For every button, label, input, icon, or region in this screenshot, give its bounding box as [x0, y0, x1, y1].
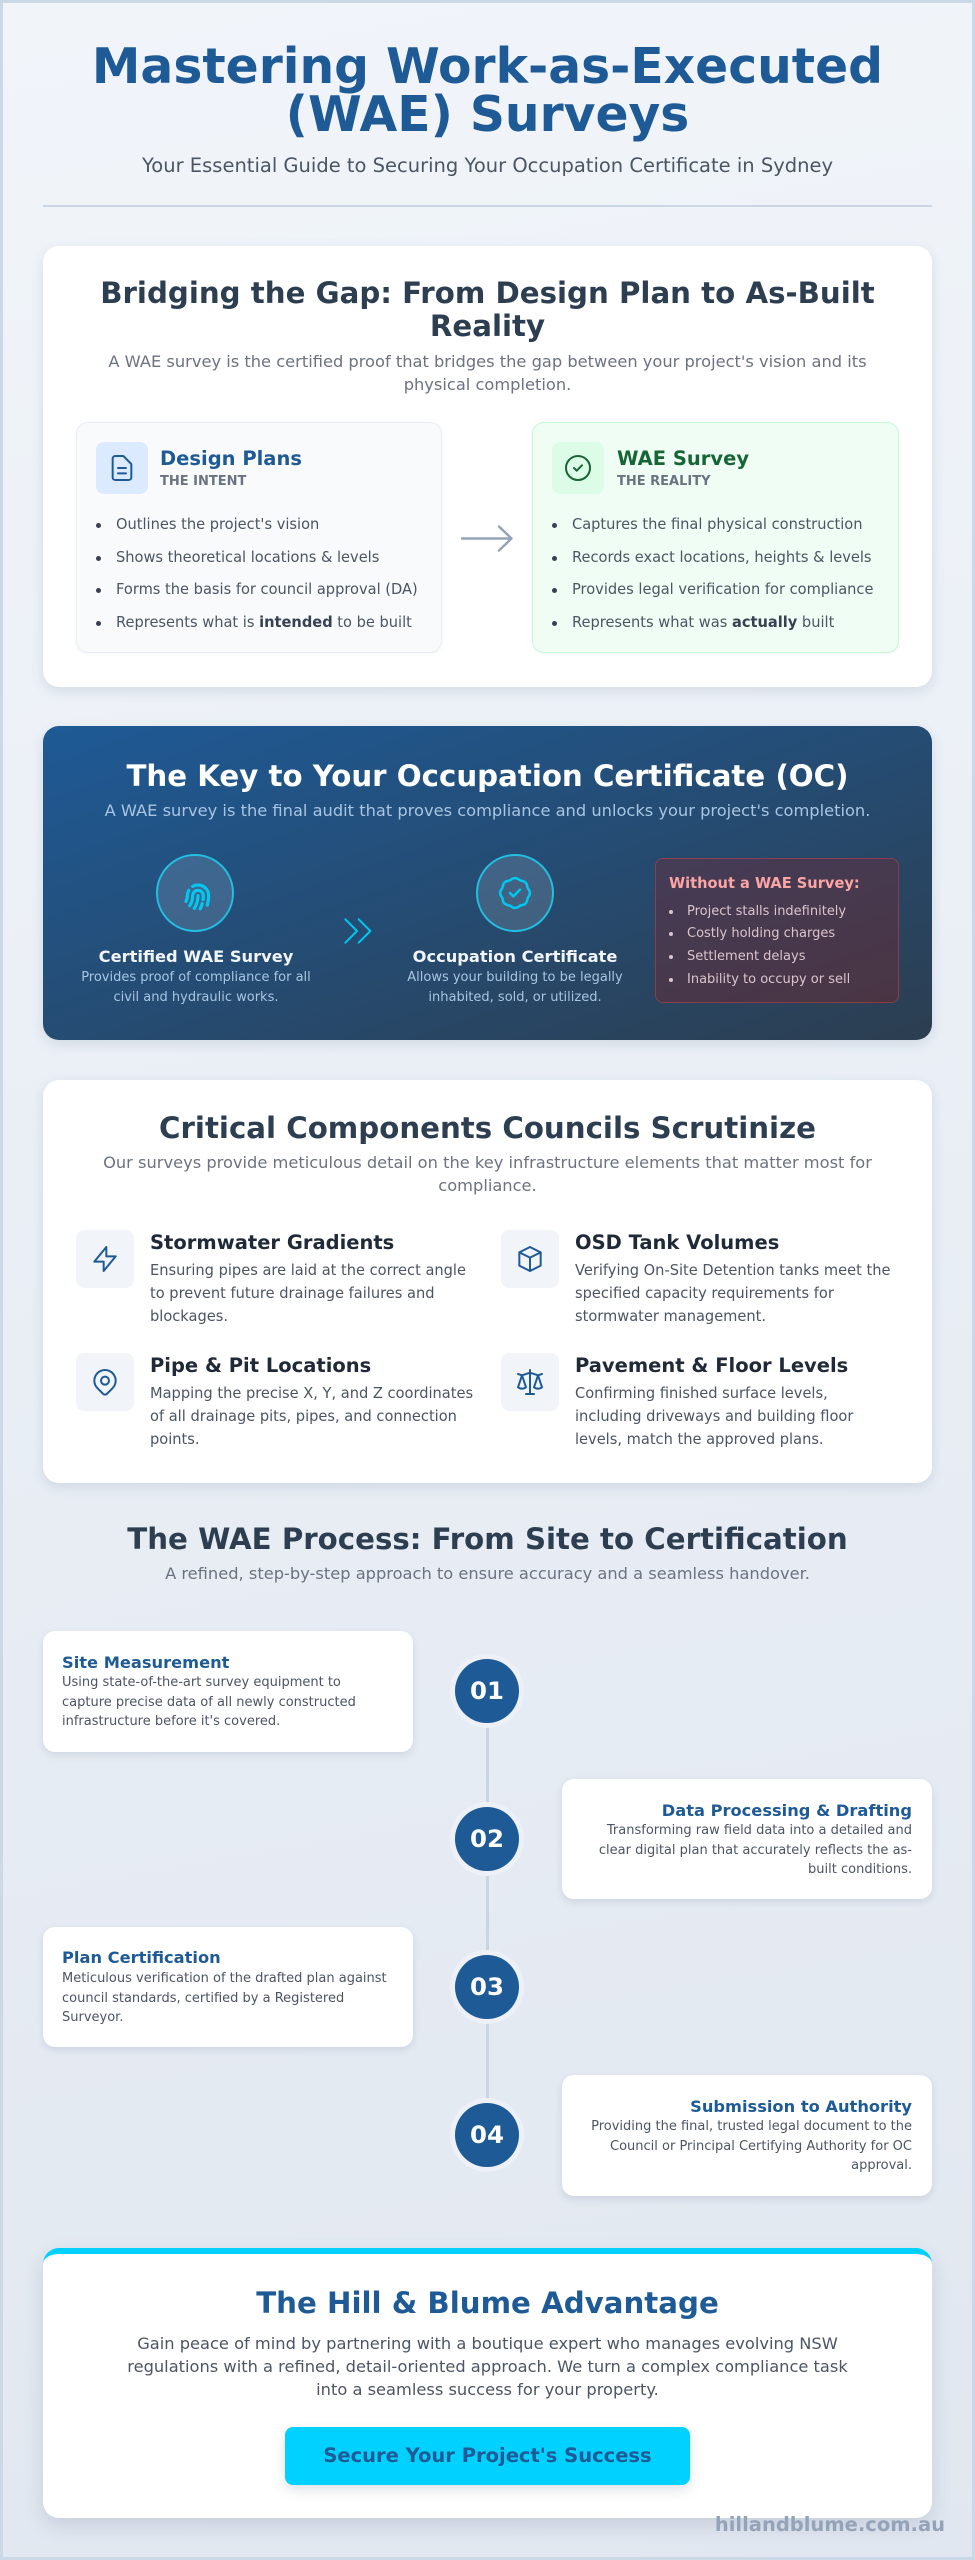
timeline line [486, 1691, 488, 2135]
icon: fingerprint circle [156, 854, 234, 932]
heading: Critical Components Councils Scrutinize [159, 1111, 816, 1145]
intro text [108, 352, 867, 394]
step title: Data Processing & Drafting [662, 1801, 912, 1820]
body text: Gain peace of mind by partnering with a boutique expert who manages evolving NSW [137, 2334, 838, 2353]
component text: blockages. [150, 1308, 228, 1325]
intro text: A refined, step-by-step approach to ensure accuracy and a seamless handover. [165, 1564, 810, 1583]
icon: document [96, 442, 148, 494]
icon: badge circle [476, 854, 554, 932]
icon: bolt [76, 1230, 134, 1288]
component text [150, 1262, 466, 1325]
panel: design plans [76, 422, 442, 653]
step title: Plan Certification [62, 1948, 221, 1967]
step 03 number [455, 1955, 519, 2019]
component title: Pipe & Pit Locations [150, 1354, 371, 1377]
panel: hill and blume advantage [43, 2248, 932, 2518]
step text: occupation certificate: inhabited, sold, or utilized. [428, 990, 602, 1004]
callout list [669, 904, 850, 987]
step text: built conditions. [808, 1862, 912, 1877]
component text: Verifying On-Site Detention tanks meet the [575, 1262, 890, 1279]
step text: Using state-of-the-art survey equipment to [62, 1675, 341, 1690]
component text: specified capacity requirements for [575, 1285, 834, 1302]
body text [127, 2334, 848, 2399]
step text: clear digital plan that accurately reflects the as- [599, 1842, 912, 1858]
step text: occupation certificate [407, 970, 623, 1004]
component title: Stormwater Gradients [150, 1231, 394, 1254]
title: (WAE) Surveys [286, 87, 689, 143]
step 03 card [43, 1927, 413, 2047]
WAE survey list: Represents what was actually built [572, 614, 834, 630]
heading: The Key to Your Occupation Certificate (OC) [126, 759, 849, 793]
step text: certified survey [81, 970, 311, 1004]
step text [62, 1971, 387, 2025]
step text [599, 1823, 912, 1877]
body text: regulations with a refined, detail-oriented approach. We turn a complex compliance task [127, 2357, 848, 2376]
panel: bridging the gap [43, 246, 932, 687]
step text: occupation certificate: Allows your building to be legally [407, 970, 623, 985]
design plans list: Outlines the project's vision [116, 516, 319, 533]
step text [591, 2119, 912, 2173]
heading: Reality [430, 309, 545, 343]
step 04 number: 04 [470, 2120, 504, 2149]
icon: cube [501, 1230, 559, 1288]
icon: location pin [76, 1353, 134, 1411]
header [43, 39, 932, 207]
callout list: Settlement delays [687, 949, 805, 964]
component text: Ensuring pipes are laid at the correct angle [150, 1262, 466, 1279]
step text: Council or Principal Certifying Authority for OC [610, 2138, 912, 2154]
step 04 number [455, 2103, 519, 2167]
panel: occupation certificate [43, 726, 932, 1040]
component text: points. [150, 1431, 200, 1448]
step text: Providing the final, trusted legal document to the [591, 2119, 912, 2134]
callout list: Project stalls indefinitely [687, 904, 846, 918]
component: OSD tank volumes [501, 1230, 890, 1325]
heading: The Hill & Blume Advantage [256, 2286, 719, 2320]
step text: council standards, certified by a Registered [62, 1990, 344, 2006]
component text [575, 1262, 890, 1325]
panel tag: THE REALITY [617, 474, 711, 489]
component text: stormwater management. [575, 1308, 766, 1325]
intro text: A WAE survey is the certified proof that bridges the gap between your project's vision and its [108, 352, 867, 371]
button [285, 2427, 690, 2485]
body text: into a seamless success for your property. [316, 2380, 659, 2399]
intro text: compliance. [438, 1176, 537, 1195]
arrow [461, 525, 513, 552]
step label: certified survey: Certified WAE Survey [99, 947, 293, 966]
header divider [43, 205, 932, 207]
step 01 number [455, 1659, 519, 1723]
component text [575, 1385, 854, 1448]
step text: infrastructure before it's covered. [62, 1714, 280, 1729]
component text: levels, match the approved plans. [575, 1431, 824, 1448]
intro text: A WAE survey is the final audit that proves compliance and unlocks your project's completion. [105, 801, 870, 820]
button: Secure Your Project's Success [323, 2444, 652, 2467]
design plans list: Forms the basis for council approval (DA) [116, 581, 418, 598]
intro text: Our surveys provide meticulous detail on the key infrastructure elements that matter most for [103, 1153, 872, 1172]
component: pipe and pit locations [76, 1353, 473, 1448]
WAE survey list: Captures the final physical construction [572, 516, 862, 533]
step title: Submission to Authority [690, 2097, 912, 2116]
subtitle: Your Essential Guide to Securing Your Occupation Certificate in Sydney [142, 154, 833, 177]
icon: double chevron [344, 918, 372, 944]
step text: certified survey: civil and hydraulic works. [113, 990, 278, 1004]
step text: Transforming raw field data into a detailed and [607, 1823, 912, 1838]
step text: Meticulous verification of the drafted plan against [62, 1971, 387, 1986]
component: pavement and floor levels [501, 1353, 854, 1448]
component text: Mapping the precise X, Y, and Z coordinates [150, 1385, 473, 1402]
step 04 card [562, 2075, 932, 2196]
step text: capture precise data of all newly constructed [62, 1694, 356, 1710]
design plans list: Represents what is intended to be built [116, 614, 412, 630]
component title: OSD Tank Volumes [575, 1231, 779, 1254]
panel: WAE survey [532, 422, 899, 653]
component title: Pavement & Floor Levels [575, 1354, 848, 1377]
component text: of all drainage pits, pipes, and connection [150, 1408, 457, 1425]
step text [62, 1675, 356, 1729]
title: Mastering Work-as-Executed [92, 39, 883, 95]
step title: Site Measurement [62, 1653, 229, 1672]
intro text: physical completion. [404, 375, 571, 394]
heading: The WAE Process: From Site to Certification [127, 1522, 848, 1556]
component text: to prevent future drainage failures and [150, 1285, 435, 1302]
step label: occupation certificate: Occupation Certificate [413, 947, 617, 966]
panel: critical components [43, 1080, 932, 1483]
panel title: WAE Survey [617, 447, 749, 470]
website watermark: hillandblume.com.au [715, 2513, 945, 2536]
callout: without a WAE survey [655, 858, 899, 1003]
callout list: Inability to occupy or sell [687, 972, 850, 987]
WAE survey list [552, 516, 873, 630]
component text: including driveways and building floor [575, 1408, 853, 1425]
step 02 card [562, 1779, 932, 1899]
step 01 card [43, 1631, 413, 1752]
heading: Bridging the Gap: From Design Plan to As-Built [100, 276, 875, 310]
WAE survey list: Provides legal verification for compliance [572, 581, 873, 598]
step 01 number: 01 [470, 1676, 504, 1705]
title [92, 39, 883, 143]
callout heading: Without a WAE Survey: [669, 875, 860, 892]
step 02 number: 02 [470, 1824, 504, 1853]
callout list: Costly holding charges [687, 926, 835, 941]
step 03 number: 03 [470, 1972, 504, 2001]
component: stormwater gradients [76, 1230, 466, 1325]
design plans list [96, 516, 418, 630]
step text: certified survey: Provides proof of compliance for all [81, 970, 311, 985]
component text [150, 1385, 473, 1448]
step text: approval. [851, 2158, 912, 2173]
heading [100, 276, 875, 343]
step 02 number [455, 1807, 519, 1871]
WAE survey list: Records exact locations, heights & levels [572, 548, 872, 566]
icon: scales [501, 1353, 559, 1411]
section: process timeline [127, 1522, 848, 1583]
intro text [103, 1153, 872, 1195]
step text: Surveyor. [62, 2010, 123, 2025]
component text: Confirming finished surface levels, [575, 1385, 828, 1402]
icon: check circle [552, 442, 604, 494]
design plans list: Shows theoretical locations & levels [116, 548, 379, 566]
panel tag: THE INTENT [160, 474, 246, 489]
panel title: Design Plans [160, 447, 302, 470]
